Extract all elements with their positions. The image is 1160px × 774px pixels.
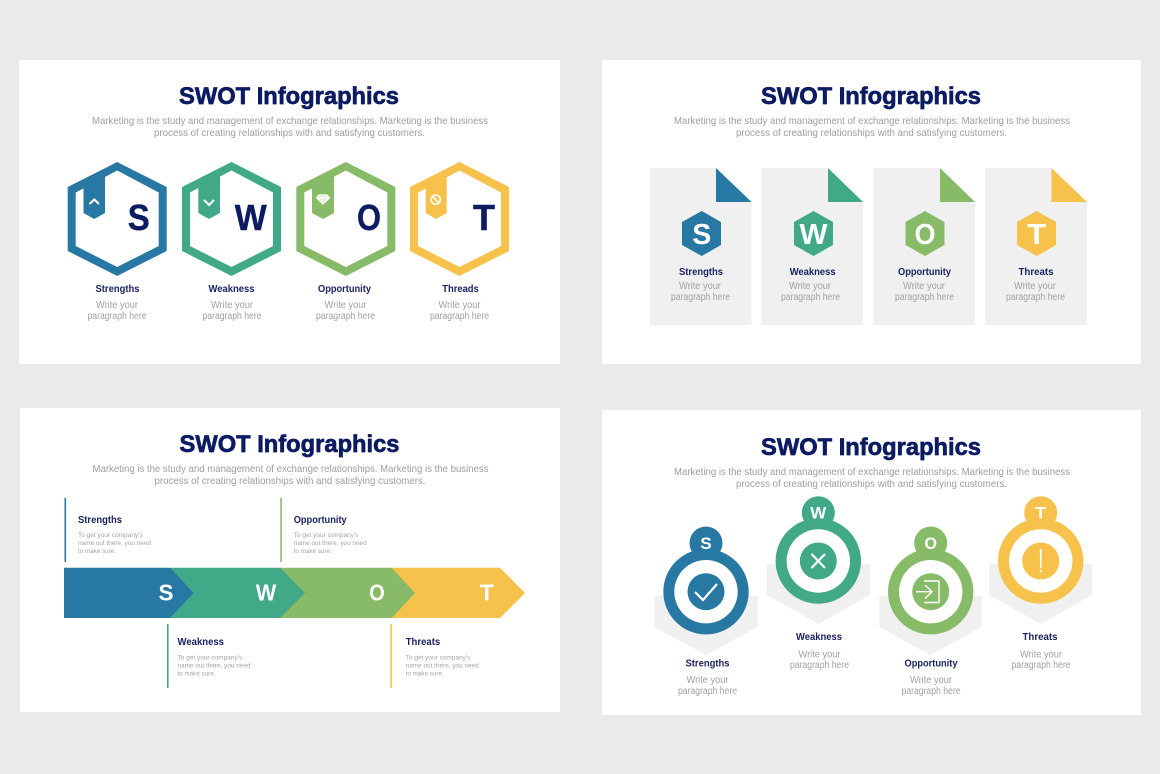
card: Weakness: paragraph here: [781, 292, 840, 303]
callout: Opportunity: Opportunity: [294, 514, 347, 526]
panel: document cards SWOT: [602, 60, 1141, 364]
label: Weakness: Write your: [211, 300, 254, 311]
icon: chevron down: [204, 200, 214, 205]
label: Weakness: paragraph here: [202, 311, 262, 322]
callout: Strengths: [64, 498, 151, 562]
card: Strengths: paragraph here: [671, 292, 730, 303]
arrow band: T: [480, 580, 494, 606]
arrow band: S: [158, 580, 174, 606]
callout: Threats: To get your company's: [406, 654, 471, 662]
label: Strengths: Write your: [686, 675, 729, 686]
callout: Strengths: name out there, you need: [78, 540, 151, 547]
badge: Weakness: W: [810, 504, 827, 523]
badge: Strengths: [654, 526, 758, 655]
callout: Threats: name out there, you need: [406, 662, 479, 670]
title: SWOT Infographics: [180, 431, 400, 458]
label: Weakness: paragraph here: [790, 660, 849, 671]
label: Weakness: [202, 283, 262, 322]
hexagon: Strengths: S: [128, 197, 150, 238]
card: Threats: T: [1027, 219, 1047, 251]
arrow band: O: [369, 580, 385, 606]
card: Strengths: [650, 168, 752, 325]
label: Strengths: Strengths: [686, 658, 730, 670]
hexagon: Threads: [410, 162, 509, 276]
title: SWOT Infographics: [761, 83, 981, 110]
card: Threats: paragraph here: [1006, 292, 1065, 303]
card: Threats: Write your: [1014, 281, 1057, 292]
callout: Weakness: name out there, you need: [178, 662, 251, 670]
callout: Opportunity: name out there, you need: [294, 540, 367, 547]
panel: arrow SWOT: [20, 408, 560, 712]
card: Opportunity: paragraph here: [895, 292, 954, 303]
callout: Strengths: Strengths: [78, 514, 122, 526]
label: Opportunity: paragraph here: [316, 311, 375, 322]
title: SWOT Infographics: [761, 434, 981, 461]
badge: Threats: [989, 496, 1092, 624]
callout: Threats: [390, 624, 479, 688]
intro text: Marketing is the study and management of exchange relationships. Marketing is the business: [92, 115, 488, 127]
icon: exclamation: [1040, 549, 1042, 572]
label: Opportunity: [316, 283, 375, 322]
callout: Weakness: [167, 624, 251, 688]
intro text: process of creating relationships with and satisfying customers.: [736, 127, 1007, 139]
card: Opportunity: Opportunity: [898, 266, 951, 278]
icon: ban: [431, 195, 440, 204]
label: Strengths: Strengths: [96, 283, 140, 295]
callout: Weakness: To get your company's: [178, 654, 243, 662]
intro text: [92, 115, 488, 139]
badge: Opportunity: [879, 526, 982, 655]
intro text: process of creating relationships with and satisfying customers.: [154, 475, 426, 487]
label: Threads: [430, 283, 489, 322]
icon: chevron up: [90, 200, 99, 204]
label: Weakness: Weakness: [208, 283, 255, 295]
card: Opportunity: [874, 168, 975, 325]
hexagon: Opportunity: [296, 162, 395, 276]
hexagon: Threads: T: [473, 197, 495, 238]
hexagon: Strengths: [68, 162, 167, 276]
label: Weakness: Write your: [798, 650, 841, 660]
card: Threats: [985, 168, 1087, 325]
card: Strengths: Write your: [679, 281, 722, 292]
badge: Strengths: S: [700, 534, 712, 553]
label: Threats: paragraph here: [1012, 660, 1071, 671]
card: Weakness: Weakness: [790, 266, 836, 278]
arrow band: [64, 568, 525, 618]
label: Opportunity: Opportunity: [904, 658, 958, 670]
panel: circle badges SWOT: [602, 410, 1141, 715]
card: Weakness: W: [800, 219, 828, 251]
hexagon: Weakness: W: [235, 197, 267, 238]
label: Threats: Threats: [1022, 631, 1058, 643]
callout: Strengths: To get your company's: [78, 532, 143, 539]
callout: Weakness: Weakness: [178, 636, 224, 648]
card: Opportunity: Write your: [903, 281, 946, 292]
icon: enter: [916, 581, 939, 602]
intro text: Marketing is the study and management of exchange relationships. Marketing is the business: [92, 463, 488, 475]
label: Strengths: Write your: [96, 300, 139, 311]
card: Weakness: Write your: [789, 281, 832, 292]
label: Opportunity: Write your: [324, 300, 367, 311]
callout: Strengths: to make sure.: [78, 548, 116, 555]
label: Threads: Threads: [442, 283, 479, 295]
intro text: [674, 466, 1070, 490]
card: Strengths: S: [692, 219, 711, 251]
callout: Threats: Threats: [406, 636, 440, 648]
label: Strengths: [678, 658, 737, 697]
intro text: [92, 463, 488, 487]
label: Strengths: [88, 283, 147, 322]
label: Threats: [1012, 631, 1071, 671]
label: Threats: Write your: [1020, 650, 1063, 660]
arrow band: W: [256, 580, 277, 606]
intro text: Marketing is the study and management of exchange relationships. Marketing is the business: [674, 115, 1070, 127]
hexagon: Opportunity: O: [357, 197, 381, 238]
panel: hexagon SWOT: [19, 60, 560, 364]
intro text: [674, 115, 1070, 139]
intro text: process of creating relationships with and satisfying customers.: [736, 478, 1007, 490]
label: Opportunity: paragraph here: [902, 686, 961, 697]
label: Weakness: [790, 631, 849, 671]
label: Opportunity: Opportunity: [318, 283, 371, 295]
icon: diamond: [316, 195, 330, 204]
intro text: process of creating relationships with and satisfying customers.: [154, 127, 425, 139]
badge: Weakness: [767, 496, 870, 624]
hexagon: Weakness: [182, 162, 281, 276]
title: SWOT Infographics: [179, 83, 399, 110]
callout: Opportunity: to make sure.: [294, 548, 332, 555]
callout: Weakness: to make sure.: [178, 670, 216, 678]
badge: Opportunity: O: [924, 534, 937, 553]
card: Weakness: [762, 168, 863, 325]
label: Opportunity: [902, 658, 961, 697]
badge: Threats: T: [1035, 504, 1047, 523]
callout: Threats: to make sure.: [406, 670, 444, 678]
card: Threats: Threats: [1018, 266, 1054, 278]
icon: cross: [812, 554, 825, 568]
callout: Opportunity: To get your company's: [294, 532, 359, 539]
intro text: Marketing is the study and management of exchange relationships. Marketing is the business: [674, 466, 1070, 478]
label: Strengths: paragraph here: [88, 311, 147, 322]
card: Strengths: Strengths: [679, 266, 723, 278]
label: Opportunity: Write your: [910, 675, 953, 686]
label: Strengths: paragraph here: [678, 686, 737, 697]
label: Weakness: Weakness: [796, 631, 842, 643]
label: Threads: paragraph here: [430, 311, 489, 322]
card: Opportunity: O: [914, 219, 936, 251]
label: Threads: Write your: [438, 300, 481, 311]
icon: check: [695, 584, 717, 600]
callout: Opportunity: [280, 498, 367, 562]
